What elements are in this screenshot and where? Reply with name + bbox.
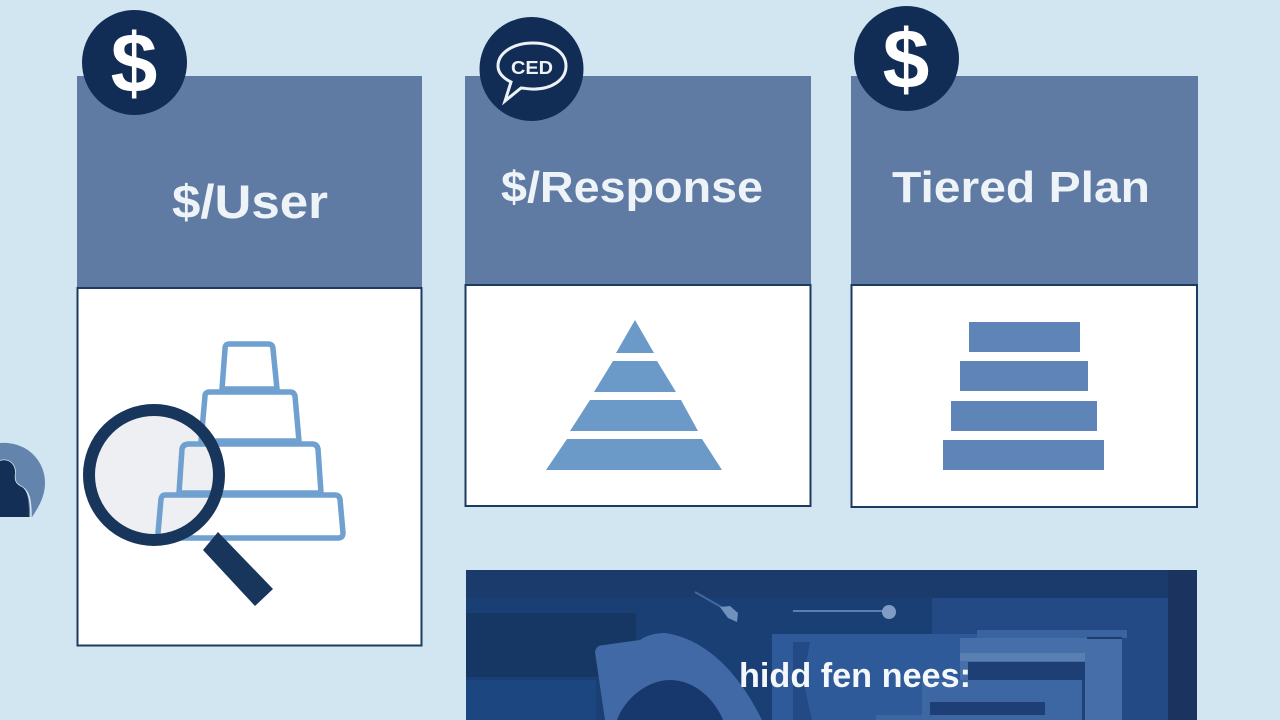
icon: dollar badge	[82, 10, 187, 115]
icon: speech bubble badge: CED	[511, 58, 553, 78]
icon: speech bubble badge	[480, 17, 584, 121]
panel header: Tiered Plan	[851, 76, 1198, 285]
panel body: $/User	[78, 288, 422, 646]
heading: $/Response: $/Response	[501, 163, 763, 212]
heading: $/User: $/User	[172, 175, 328, 228]
panel: $/User	[77, 10, 422, 646]
illustration: person silhouette	[595, 633, 762, 720]
panel: Tiered Plan	[851, 6, 1198, 507]
panel: hidden fees image	[466, 570, 1197, 720]
icon: stacked tier bars	[943, 322, 1104, 470]
icon: outlined tier pyramid	[94, 344, 343, 538]
icon: partial user avatar	[0, 443, 45, 517]
panel header: $/User	[77, 76, 422, 288]
caption: hidden fees text: hidd fen nees:	[739, 657, 971, 695]
icon: solid tier pyramid	[546, 320, 722, 470]
heading: Tiered Plan: Tiered Plan	[892, 163, 1150, 212]
panel: $/Response	[465, 17, 811, 506]
icon: dollar badge: $	[111, 16, 157, 110]
icon: dollar badge: $	[883, 12, 929, 106]
illustration: floating nodes	[695, 592, 896, 622]
panel body: $/Response	[466, 285, 810, 506]
icon: magnifying glass	[89, 410, 273, 606]
panel header: $/Response	[465, 76, 811, 285]
illustration: layered screens	[772, 598, 1168, 720]
icon: dollar badge	[854, 6, 959, 111]
panel body: Tiered Plan	[852, 285, 1197, 507]
